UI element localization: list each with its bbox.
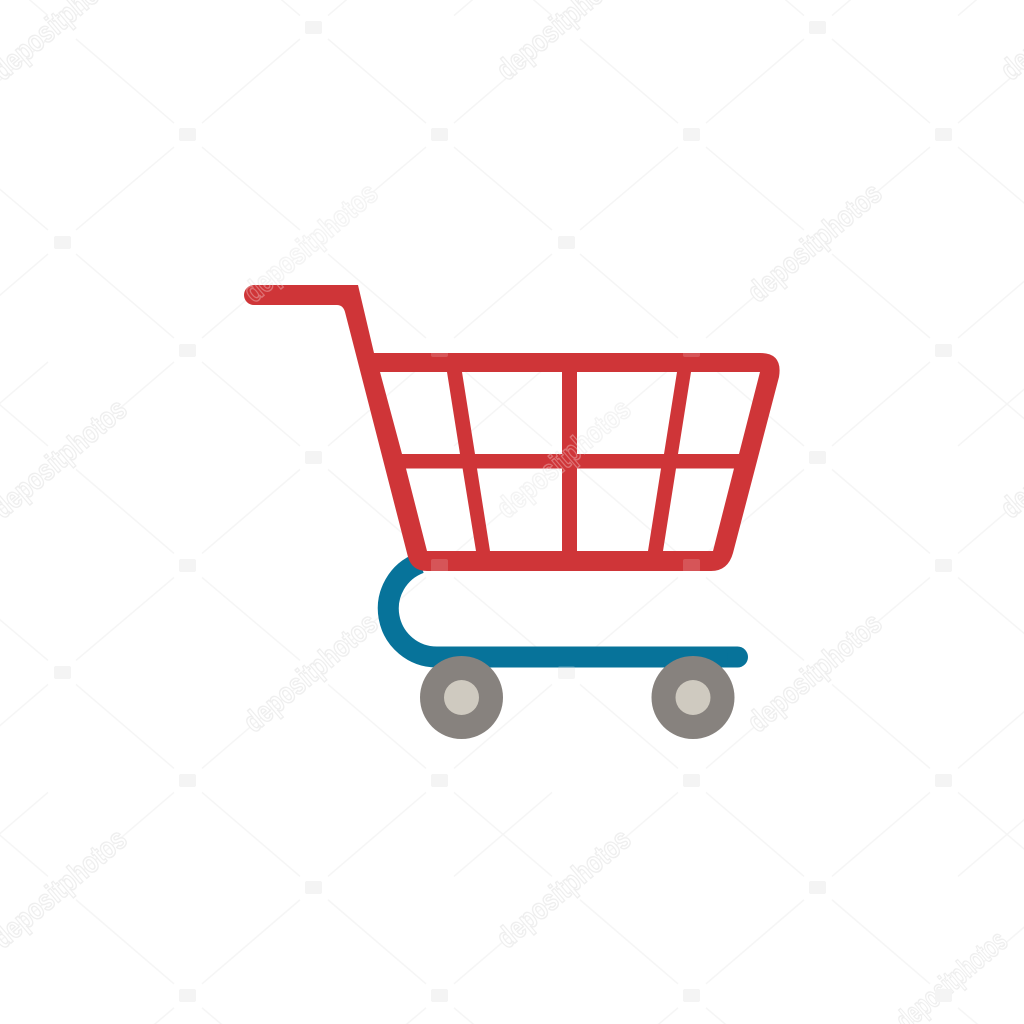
icon: shopping cart — [244, 285, 780, 739]
watermark text: depositphotos — [237, 177, 384, 309]
watermark overlay on cart: text: depositphotos — [490, 393, 637, 525]
watermark text: depositphotos — [741, 177, 888, 309]
watermark text: depositphotos — [237, 607, 384, 739]
cart basket and handle (red) — [244, 285, 780, 571]
watermark overlay on cart: cameras — [431, 344, 700, 679]
cart chassis (blue) — [388, 563, 738, 657]
right wheel — [652, 656, 734, 739]
left wheel — [420, 656, 503, 739]
watermark text: depositphotos — [741, 607, 888, 739]
watermark text: depositphotos — [490, 393, 637, 525]
chassis rounded end — [727, 646, 748, 668]
watermark text: depositphotos — [490, 823, 637, 955]
watermark overlay on cart: text — [237, 177, 637, 525]
watermark overlay on cart: text: depositphotos — [237, 177, 384, 309]
